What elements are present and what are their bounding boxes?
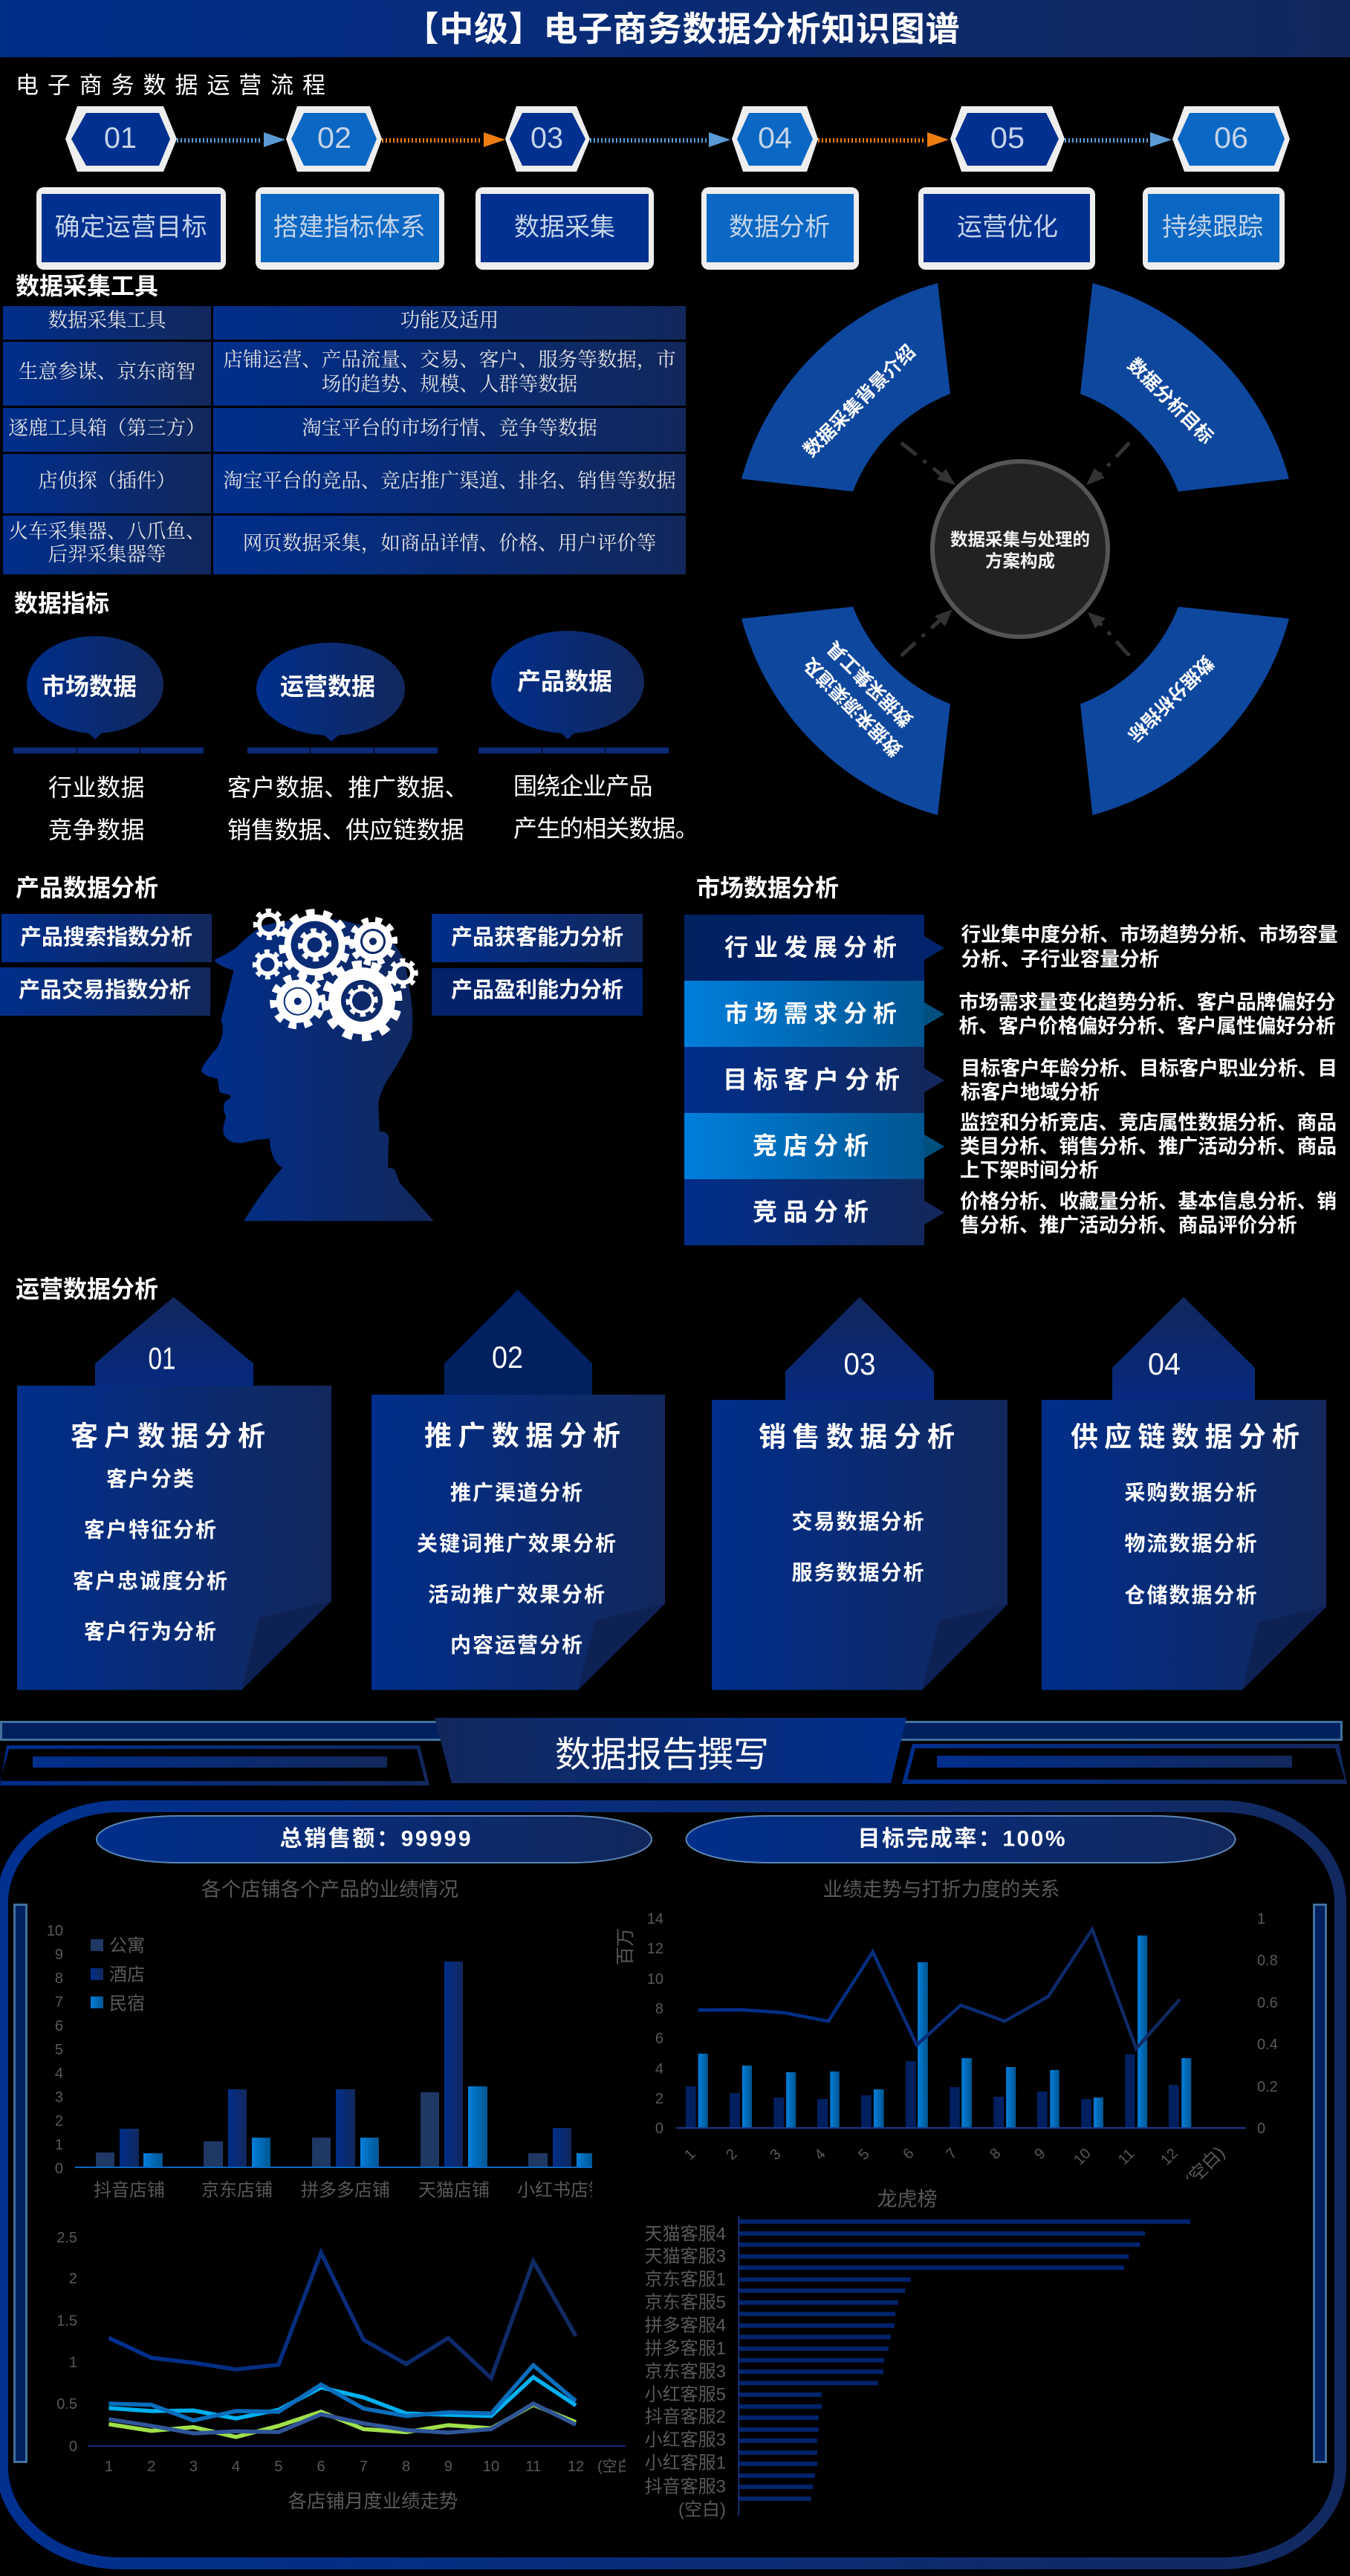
- step box 4: [701, 187, 859, 270]
- sector: indicators: 数据分析指标: [1123, 652, 1217, 745]
- legend: 民宿: [109, 1994, 145, 2014]
- row: demand: 市场需求量变化趋势分析、客户品牌偏好分: [958, 991, 1336, 1013]
- step box 1: 确定运营目标: [55, 213, 207, 241]
- bubble: product data: 产品数据: [517, 668, 612, 695]
- chart: performance per shop and product: 10: [47, 1923, 63, 1939]
- sector: background: [741, 283, 950, 492]
- bubble: operations data: 运营数据: [280, 673, 375, 700]
- text: product data: 产生的相关数据。: [513, 815, 699, 842]
- card 01: 客户行为分析: [84, 1620, 218, 1644]
- row: competitor stores: 上下架时间分析: [960, 1159, 1099, 1181]
- table: collection tools: 网页数据采集，如商品详情、价格、用户评价等: [243, 532, 656, 554]
- step box 3: 数据采集: [514, 213, 615, 241]
- chart: monthly performance per shop: 1: [69, 2355, 77, 2371]
- chart: performance per shop and product: [47, 1878, 606, 2201]
- step box 6: [1143, 187, 1285, 270]
- row: industry: 行业发展分析: [724, 934, 903, 961]
- x labels: 12: [568, 2459, 584, 2475]
- box: search index: 产品搜索指数分析: [20, 925, 192, 950]
- icon: head silhouette: [201, 919, 434, 1221]
- x labels: 8: [402, 2459, 410, 2475]
- text: product data: 围绕企业产品: [513, 773, 653, 799]
- x labels: 抖音店铺: [94, 2180, 165, 2201]
- kpi: target completion: [687, 1816, 1235, 1863]
- labels: 京东客服1: [645, 2269, 726, 2290]
- hexagon 03: [505, 106, 590, 172]
- card 04: 物流数据分析: [1124, 1532, 1259, 1555]
- labels: 京东客服5: [645, 2293, 726, 2312]
- card 04: 供应链数据分析: [1071, 1422, 1299, 1452]
- table: collection tools: 数据采集工具: [48, 309, 167, 331]
- icon: gears: [252, 905, 418, 1046]
- x labels: 7: [360, 2459, 368, 2475]
- card 04: 仓储数据分析: [1124, 1584, 1259, 1606]
- chart: leaderboard: [645, 2188, 1190, 2520]
- section banner: report writing: 数据报告撰写: [555, 1736, 769, 1774]
- arrow 2: [382, 132, 505, 147]
- centre circle: [932, 461, 1108, 637]
- panel: market analysis: [684, 915, 1338, 1245]
- table: collection tools: 功能及适用: [400, 309, 499, 331]
- side bar left: [15, 1905, 27, 2462]
- step box 2: [256, 187, 444, 270]
- box: trade index: [0, 967, 210, 1016]
- step box 5: 运营优化: [957, 213, 1058, 241]
- row: competitor stores: 监控和分析竞店、竞店属性数据分析、商品: [960, 1112, 1337, 1134]
- chart: performance per shop and product: 2: [55, 2113, 63, 2129]
- table: collection tools: 逐鹿工具箱（第三方）: [9, 417, 205, 439]
- heading: operations analysis: 运营数据分析: [16, 1276, 158, 1302]
- chart: trend vs discount: 0: [655, 2121, 663, 2137]
- kpi: target completion: 目标完成率：100%: [857, 1826, 1065, 1852]
- chart: monthly performance per shop: 2.5: [56, 2230, 77, 2246]
- chart: performance per shop and product: 0: [55, 2161, 63, 2177]
- panel: operations analysis: [17, 1290, 1326, 1690]
- hexagon 06: 06: [1214, 122, 1248, 155]
- title banner: [0, 0, 1350, 57]
- chart: performance per shop and product: 1: [55, 2137, 63, 2153]
- step box 6: 持续跟踪: [1162, 213, 1263, 241]
- chart: trend vs discount: 0: [1257, 2121, 1265, 2137]
- text: operations data: 客户数据、推广数据、: [227, 774, 469, 801]
- legend: 酒店: [109, 1965, 145, 1985]
- card 01: 客户分类: [106, 1467, 195, 1490]
- chart: performance per shop and product: 8: [55, 1970, 63, 1987]
- legend: [91, 1936, 145, 2014]
- chart: trend vs discount: 0.8: [1257, 1953, 1278, 1969]
- card 02: 02: [492, 1340, 523, 1375]
- kpi: total sales: 总销售额：99999: [279, 1826, 471, 1852]
- row: demand: 市场需求分析: [724, 1000, 903, 1027]
- hexagon 05: [950, 106, 1065, 172]
- hexagon 02: [286, 106, 382, 172]
- row: competitor products: 竞品分析: [753, 1198, 874, 1226]
- row: competitor stores: 类目分析、销售分析、推广活动分析、商品: [960, 1135, 1337, 1158]
- chart: performance per shop and product: 4: [55, 2066, 63, 2082]
- card 03: 销售数据分析: [759, 1422, 955, 1452]
- x labels: 天猫店铺: [418, 2180, 490, 2201]
- chart: trend vs discount: 1: [1257, 1911, 1265, 1927]
- box: search index: [1, 914, 212, 962]
- card 02: [371, 1290, 665, 1690]
- card 01: 客户数据分析: [71, 1421, 265, 1452]
- table: collection tools: 店侦探（插件）: [38, 470, 176, 492]
- table: collection tools: 生意参谋、京东商智: [19, 360, 195, 383]
- x labels: (空白): [597, 2458, 637, 2475]
- x labels: 京东店铺: [201, 2180, 273, 2201]
- chart: leaderboard: 龙虎榜: [877, 2188, 938, 2210]
- sector: goals: [1080, 283, 1289, 492]
- card 01: 客户忠诚度分析: [73, 1569, 229, 1593]
- hexagon 05: 05: [990, 122, 1025, 155]
- chart: performance per shop and product: 7: [55, 1994, 63, 2011]
- hexagon 01: 01: [104, 122, 137, 155]
- card 02: 活动推广效果分析: [428, 1583, 606, 1606]
- row: target customers: 目标客户年龄分析、目标客户职业分析、目: [961, 1057, 1337, 1080]
- labels: 天猫客服3: [645, 2247, 726, 2266]
- x labels: 1: [681, 2146, 699, 2164]
- x labels: 3: [189, 2459, 198, 2475]
- sector: sources: 数据采集工具: [823, 637, 917, 730]
- sector: sources: 数据来源渠道及: [799, 653, 906, 760]
- chart: performance per shop and product: 6: [55, 2018, 63, 2034]
- x labels: 2: [723, 2146, 741, 2164]
- labels: (空白): [678, 2499, 726, 2520]
- row: competitor products: [684, 1179, 1337, 1245]
- centre circle: 方案构成: [985, 551, 1055, 571]
- chart: monthly performance per shop: 0: [69, 2439, 77, 2455]
- card 02: 推广渠道分析: [450, 1482, 584, 1504]
- labels: 小红客服1: [645, 2453, 726, 2473]
- chart: trend vs discount: 10: [647, 1971, 663, 1988]
- chart: performance per shop and product: 各个店铺各个产品的业绩情况: [201, 1878, 458, 1901]
- table: collection tools: [3, 306, 686, 574]
- table: collection tools: 火车采集器、八爪鱼、: [9, 520, 205, 542]
- sector: goals: 数据分析目标: [1123, 354, 1217, 448]
- panel: product analysis: [0, 905, 643, 1221]
- chart: trend vs discount: 百万: [615, 1928, 636, 1965]
- x labels: 11: [525, 2459, 541, 2475]
- x labels: 4: [811, 2146, 829, 2164]
- card 03: 服务数据分析: [791, 1561, 926, 1584]
- labels: 京东客服3: [645, 2361, 726, 2382]
- kpi: total sales: [97, 1816, 652, 1863]
- box: acquisition: [432, 914, 643, 962]
- labels: 抖音客服3: [645, 2477, 726, 2496]
- chart: trend vs discount: 4: [655, 2061, 663, 2077]
- card 03: 交易数据分析: [791, 1510, 926, 1534]
- x labels: 10: [483, 2459, 499, 2475]
- x labels: 5: [274, 2459, 282, 2475]
- bubble: market data: [27, 636, 163, 739]
- labels: 拼多客服4: [645, 2315, 726, 2336]
- hexagon 03: 03: [530, 122, 563, 155]
- chart: performance per shop and product: 3: [55, 2089, 63, 2106]
- card 03: [712, 1297, 1007, 1690]
- sector: sources: [741, 607, 950, 815]
- row: industry: 分析、子行业容量分析: [961, 948, 1159, 970]
- x labels: 4: [232, 2459, 240, 2475]
- box: profit: 产品盈利能力分析: [451, 978, 623, 1002]
- hexagon 06: [1172, 106, 1290, 172]
- x labels: 11: [1115, 2146, 1138, 2168]
- labels: 小红客服3: [645, 2430, 726, 2450]
- row: competitor stores: [684, 1112, 1337, 1181]
- bar: market: [13, 747, 204, 753]
- chart: trend vs discount: 8: [655, 2001, 663, 2017]
- x labels: [94, 2181, 592, 2198]
- x labels: 小红书店铺: [517, 2180, 606, 2201]
- row: target customers: 目标客户分析: [723, 1065, 906, 1094]
- legend: 公寓: [109, 1936, 145, 1956]
- heading: market analysis: 市场数据分析: [696, 875, 839, 901]
- labels: 小红客服5: [645, 2385, 726, 2404]
- labels: [645, 2225, 726, 2520]
- card 02: 推广数据分析: [424, 1421, 620, 1451]
- chart: trend vs discount: 6: [655, 2031, 663, 2047]
- chart: monthly performance per shop: [56, 2230, 637, 2512]
- x labels: 1: [105, 2459, 113, 2475]
- arrow 3: [590, 132, 730, 147]
- step box 3: [476, 187, 654, 270]
- labels: 抖音客服2: [645, 2407, 726, 2427]
- card 04: 04: [1148, 1346, 1181, 1381]
- box: acquisition: 产品获客能力分析: [451, 925, 623, 950]
- heading: product analysis: 产品数据分析: [16, 875, 158, 901]
- bubble: product data: [491, 631, 644, 739]
- text: operations data: 销售数据、供应链数据: [227, 817, 464, 843]
- row: target customers: 标客户地域分析: [961, 1081, 1100, 1103]
- card 01: [17, 1297, 331, 1690]
- x labels: 2: [147, 2459, 155, 2475]
- labels: 拼多客服1: [645, 2339, 726, 2358]
- hexagon 01: [65, 106, 177, 172]
- title banner: 【中级】电子商务数据分析知识图谱: [404, 10, 960, 48]
- row: target customers: [684, 1047, 1337, 1113]
- table: collection tools: 场的趋势、规模、人群等数据: [322, 373, 577, 395]
- hexagon 04: 04: [758, 122, 792, 155]
- chart: trend vs discount: 0.2: [1257, 2079, 1278, 2095]
- step box 1: [36, 187, 226, 270]
- x labels: 9: [444, 2459, 452, 2475]
- chart: trend vs discount: 0.6: [1257, 1995, 1278, 2011]
- bubble: operations data: [256, 643, 405, 742]
- row: industry: 行业集中度分析、市场趋势分析、市场容量: [961, 924, 1338, 946]
- side bar right: [1314, 1905, 1325, 2462]
- x labels: [685, 2147, 1226, 2179]
- card 01: 客户特征分析: [84, 1519, 218, 1541]
- chart: trend vs discount: 12: [647, 1941, 663, 1957]
- hexagon 02: 02: [317, 122, 351, 155]
- diagram: solution composition: [741, 283, 1289, 815]
- step box 2: 搭建指标体系: [273, 213, 425, 241]
- step box 5: [918, 187, 1095, 270]
- x labels: 5: [855, 2146, 873, 2164]
- text: market data: [48, 774, 145, 843]
- arrows to centre: [901, 443, 1129, 655]
- x labels: [106, 2459, 626, 2474]
- row: competitor products: 售分析、推广活动分析、商品评价分析: [960, 1214, 1297, 1236]
- x labels: 8: [987, 2145, 1005, 2163]
- centre circle: 数据采集与处理的: [950, 530, 1090, 549]
- heading: collection tools: 数据采集工具: [16, 273, 158, 299]
- row: demand: [684, 981, 1336, 1047]
- bars: [739, 2219, 1190, 2501]
- x labels: 6: [317, 2459, 325, 2475]
- panel: process flow: [36, 106, 1290, 270]
- chart: trend vs discount: 0.4: [1257, 2037, 1278, 2053]
- panel: data indicators: [13, 631, 699, 843]
- chart: trend vs discount: 业绩走势与打折力度的关系: [823, 1878, 1059, 1901]
- card 04: 采购数据分析: [1124, 1482, 1259, 1504]
- step box 4: 数据分析: [729, 213, 830, 241]
- arrow 1: [177, 132, 285, 147]
- chart: trend vs discount: 2: [655, 2091, 663, 2107]
- sector: indicators: [1080, 607, 1289, 815]
- x labels: 12: [1158, 2145, 1181, 2169]
- arrow heads: [935, 468, 1106, 629]
- chart: monthly performance per shop: 1.5: [56, 2313, 77, 2329]
- row: industry: [684, 915, 1338, 981]
- table: collection tools: 淘宝平台的竞品、竞店推广渠道、排名、销售等数据: [223, 470, 676, 492]
- text: product data: [513, 773, 699, 842]
- card 04: [1042, 1297, 1326, 1690]
- x labels: 10: [1071, 2145, 1094, 2169]
- x labels: 拼多多店铺: [301, 2180, 390, 2201]
- lines: [108, 2253, 576, 2437]
- text: market data: 竞争数据: [48, 817, 145, 843]
- chart: monthly performance per shop: 各店铺月度业绩走势: [288, 2491, 458, 2512]
- x labels: (空白): [1181, 2143, 1229, 2190]
- text: operations data: [227, 774, 469, 843]
- bar: product: [478, 747, 669, 753]
- chart: trend vs discount: 14: [647, 1911, 663, 1927]
- table: collection tools: 后羿采集器等: [48, 543, 166, 565]
- chart: performance per shop and product: 9: [55, 1947, 63, 1963]
- labels: 天猫客服4: [645, 2225, 726, 2244]
- x labels: 7: [943, 2145, 961, 2163]
- table: collection tools: 淘宝平台的市场行情、竞争等数据: [302, 417, 597, 439]
- box: profit: [432, 968, 643, 1016]
- text: market data: 行业数据: [48, 774, 145, 801]
- hexagon 04: [732, 106, 818, 172]
- x labels: 9: [1031, 2145, 1049, 2163]
- bars: [96, 1962, 592, 2167]
- x labels: 6: [900, 2145, 918, 2163]
- row: competitor stores: 竞店分析: [753, 1132, 874, 1159]
- table: collection tools: 店铺运营、产品流量、交易、客户、服务等数据，市: [223, 348, 676, 371]
- card 02: 内容运营分析: [450, 1633, 584, 1657]
- heading: process: 电子商务数据运营流程: [16, 73, 325, 98]
- card 02: 关键词推广效果分析: [417, 1532, 617, 1555]
- x labels: 3: [767, 2146, 785, 2164]
- card 01: 01: [149, 1340, 175, 1376]
- sector: background: 数据采集背景介绍: [799, 341, 920, 461]
- chart: monthly performance per shop: 2: [69, 2271, 77, 2287]
- section banner: report writing: [0, 1718, 1347, 1785]
- arrow 4: [818, 132, 949, 147]
- chart: monthly performance per shop: 0.5: [56, 2396, 77, 2413]
- bar: operations: [247, 747, 438, 753]
- bubble: market data: 市场数据: [42, 673, 137, 700]
- bars: [686, 1930, 1191, 2127]
- row: competitor products: 价格分析、收藏量分析、基本信息分析、销: [960, 1190, 1337, 1213]
- chart: performance per shop and product: 5: [55, 2042, 63, 2058]
- box: trade index: 产品交易指数分析: [19, 978, 191, 1002]
- card 03: 03: [844, 1346, 875, 1381]
- arrow 5: [1065, 132, 1172, 147]
- chart: trend vs discount: [615, 1878, 1278, 2190]
- row: demand: 析、客户价格偏好分析、客户属性偏好分析: [958, 1015, 1336, 1037]
- heading: data indicators: 数据指标: [14, 590, 109, 617]
- report frame: [2, 1806, 1340, 2563]
